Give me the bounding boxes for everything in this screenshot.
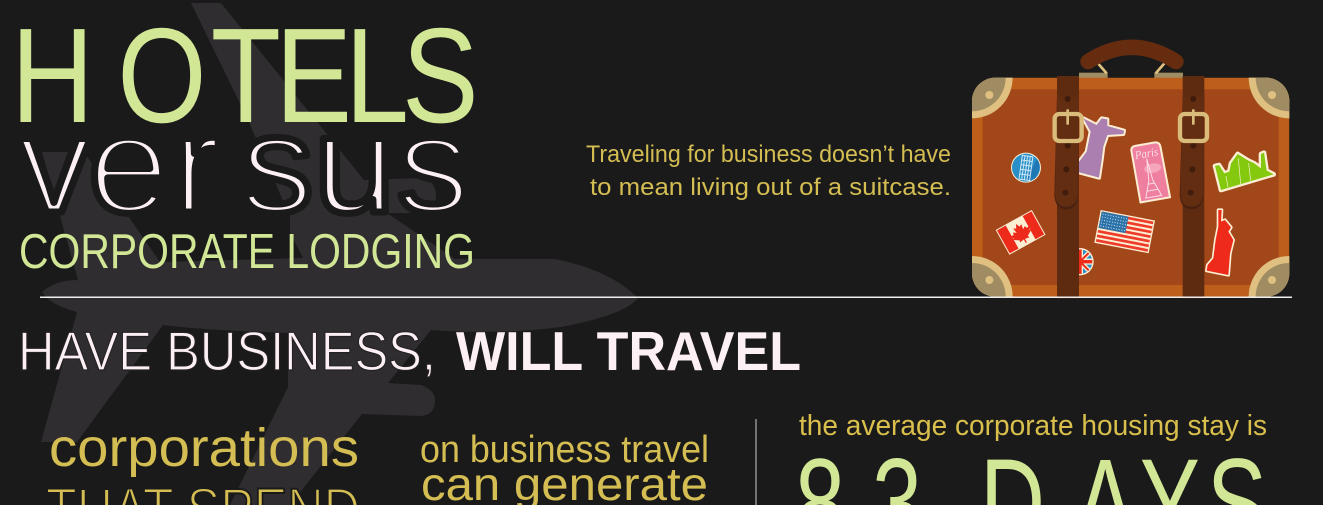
tagline: Traveling for business doesn’t have bbox=[586, 141, 951, 168]
section heading bbox=[18, 320, 801, 382]
sticker: Paris bbox=[1131, 141, 1170, 202]
sticker: Paris: Paris bbox=[1133, 144, 1159, 162]
tagline bbox=[586, 141, 951, 201]
stat: corporations that spend bbox=[46, 418, 360, 505]
left strap bbox=[1054, 76, 1082, 298]
title: versus: versus bbox=[18, 87, 470, 242]
tagline: to mean living out of a suitcase. bbox=[590, 174, 951, 201]
section heading: WILL TRAVEL bbox=[456, 320, 801, 382]
background airplane silhouette bbox=[41, 3, 638, 505]
title: HOTELS: HOTELS bbox=[11, 0, 479, 151]
stat: business travel bbox=[420, 429, 709, 505]
sticker: UK bbox=[1079, 248, 1094, 276]
sticker: Statue of Liberty bbox=[1207, 210, 1233, 275]
section heading: HAVE BUSINESS, bbox=[18, 320, 436, 382]
suitcase illustration bbox=[972, 40, 1290, 298]
sticker: Christ the Redeemer bbox=[1077, 118, 1124, 178]
sticker: Taj Mahal bbox=[1215, 153, 1274, 190]
stat: corporations that spend: corporations bbox=[49, 418, 359, 478]
suitcase handle bbox=[1079, 47, 1183, 78]
stat: average stay label: the average corporate housing stay is bbox=[799, 410, 1267, 442]
sticker: Canada bbox=[996, 210, 1046, 255]
title: corporate lodging: CORPORATE LODGING bbox=[19, 225, 475, 279]
column divider bbox=[756, 419, 757, 505]
right strap bbox=[1180, 76, 1207, 298]
suitcase body bbox=[972, 78, 1290, 296]
sticker: USA bbox=[1094, 210, 1155, 253]
sticker: Pisa bbox=[1011, 153, 1041, 183]
divider bbox=[40, 296, 1292, 298]
stat: business travel: on business travel bbox=[420, 429, 709, 471]
